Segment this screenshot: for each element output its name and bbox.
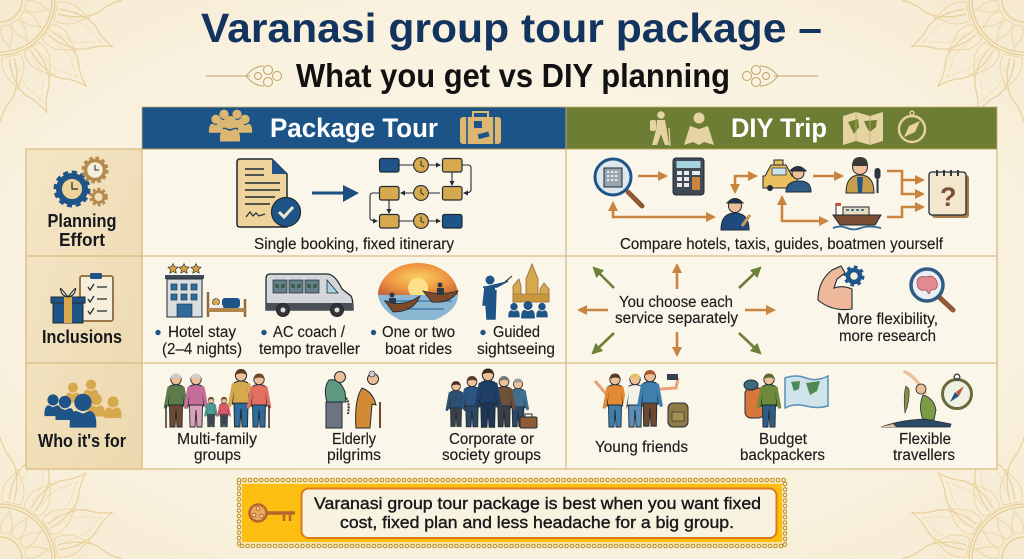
- itinerary flowchart: [370, 158, 471, 228]
- item: budget backpackers: Budget: [759, 431, 808, 448]
- label text: Effort: [59, 230, 105, 250]
- callout: best when: [237, 478, 787, 548]
- text: more flexibility: More flexibility,: [837, 311, 938, 328]
- icon: notepad with question mark: [929, 170, 969, 218]
- callout text: Varanasi group tour package is best when you want fixed: [314, 494, 761, 513]
- row label: planning effort: [48, 158, 116, 250]
- DIY cell: choose services: [579, 265, 953, 355]
- item: budget backpackers: backpackers: [740, 447, 825, 464]
- item: hotel stay: [155, 264, 245, 358]
- icon: signed document: [237, 159, 300, 227]
- item: boat rides: One or two: [382, 324, 455, 341]
- item: young friends: Young friends: [595, 439, 688, 456]
- icon: hiker: [650, 111, 670, 146]
- text: you choose each service: You choose each: [619, 294, 733, 311]
- icon: person reading map: [684, 112, 714, 145]
- icon: magnifier on hotel: [595, 159, 642, 206]
- item: corporate groups: society groups: [442, 447, 541, 464]
- ornament left: [206, 66, 282, 86]
- icon: compass: [899, 111, 925, 142]
- icon: suitcase: [460, 112, 501, 144]
- item: AC coach: [259, 274, 360, 358]
- item: flexible travellers: Flexible: [899, 431, 951, 448]
- item: boat rides: boat rides: [385, 341, 452, 358]
- row label: inclusions: [42, 273, 122, 347]
- item: elderly pilgrims: Elderly: [332, 431, 376, 448]
- item: AC coach: tempo traveller: [259, 341, 360, 358]
- item: multi-family groups: Multi-family: [177, 431, 257, 448]
- item: multi-family groups: groups: [194, 447, 241, 464]
- row: planning effort: [48, 157, 969, 253]
- callout text: cost, fixed plan and less headache for a big group.: [340, 513, 734, 532]
- caption: Compare hotels, taxis, guides, boatmen yourself: [620, 236, 944, 253]
- label text: Inclusions: [42, 327, 122, 347]
- icon: world map: [843, 112, 883, 145]
- item: budget backpackers: [740, 374, 828, 464]
- item: boat rides: [371, 263, 458, 358]
- row label: who it's for: [38, 380, 126, 451]
- header: package tour: [142, 107, 566, 149]
- item: hotel stay: Hotel stay: [168, 324, 236, 341]
- icon: group of people: [209, 110, 252, 141]
- icon: boat: [833, 203, 881, 230]
- icon: guide in uniform: [721, 198, 750, 230]
- package cell: inclusions: [155, 263, 555, 358]
- item: elderly pilgrims: [325, 371, 381, 464]
- icon: gift and checklist: [51, 273, 113, 323]
- text: more flexibility: more research: [839, 328, 936, 345]
- icon: gears with clocks: [56, 158, 107, 206]
- item: elderly pilgrims: pilgrims: [327, 447, 381, 464]
- workflow arrows: [613, 171, 923, 221]
- package cell: single booking: [237, 158, 471, 253]
- item: flexible travellers: travellers: [893, 447, 955, 464]
- icon: magnifier with brain: [911, 269, 953, 310]
- item: young friends: [595, 370, 688, 456]
- icon: flexing arm and gear: [818, 266, 863, 310]
- item: flexible travellers: [880, 372, 972, 464]
- heading: DIY Trip: DIY Trip: [731, 113, 827, 143]
- caption: Single booking, fixed itinerary: [254, 236, 454, 253]
- subheading: What you get vs DIY planning: [296, 57, 730, 94]
- item: guided sightseeing: [477, 264, 555, 358]
- item: hotel stay: (2–4 nights): [162, 341, 242, 358]
- arrow: [312, 185, 359, 202]
- package cell: audiences: [166, 368, 541, 464]
- title: [201, 5, 822, 94]
- label text: Planning: [48, 211, 116, 231]
- row: inclusions: [42, 263, 953, 358]
- row: who it's for: [38, 368, 972, 464]
- DIY cell: audiences: [595, 370, 972, 464]
- main heading: Varanasi group tour package –: [201, 5, 822, 51]
- item: guided sightseeing: Guided: [493, 324, 540, 341]
- radiating arrows: [579, 265, 774, 355]
- item: corporate groups: [442, 368, 541, 464]
- icon: key: [250, 504, 295, 522]
- text: you choose each service: service separately: [615, 310, 738, 327]
- icon: notepad with question mark: ?: [940, 182, 956, 212]
- icon: group silhouettes: [44, 380, 122, 428]
- DIY cell: compare services: [595, 157, 969, 253]
- header: DIY trip: [566, 107, 997, 149]
- icon: calculator: [673, 158, 704, 195]
- icon: taxi and driver: [763, 160, 811, 192]
- label text: Who it's for: [38, 431, 126, 451]
- icon: tour guide with microphone: [846, 157, 880, 193]
- item: AC coach: AC coach /: [273, 324, 346, 341]
- item: corporate groups: Corporate or: [449, 431, 534, 448]
- item: guided sightseeing: sightseeing: [477, 341, 555, 358]
- heading: Package Tour: Package Tour: [270, 113, 438, 143]
- item: multi-family groups: [166, 369, 270, 464]
- table body background and grid: [26, 149, 997, 469]
- ornament right: [742, 66, 818, 86]
